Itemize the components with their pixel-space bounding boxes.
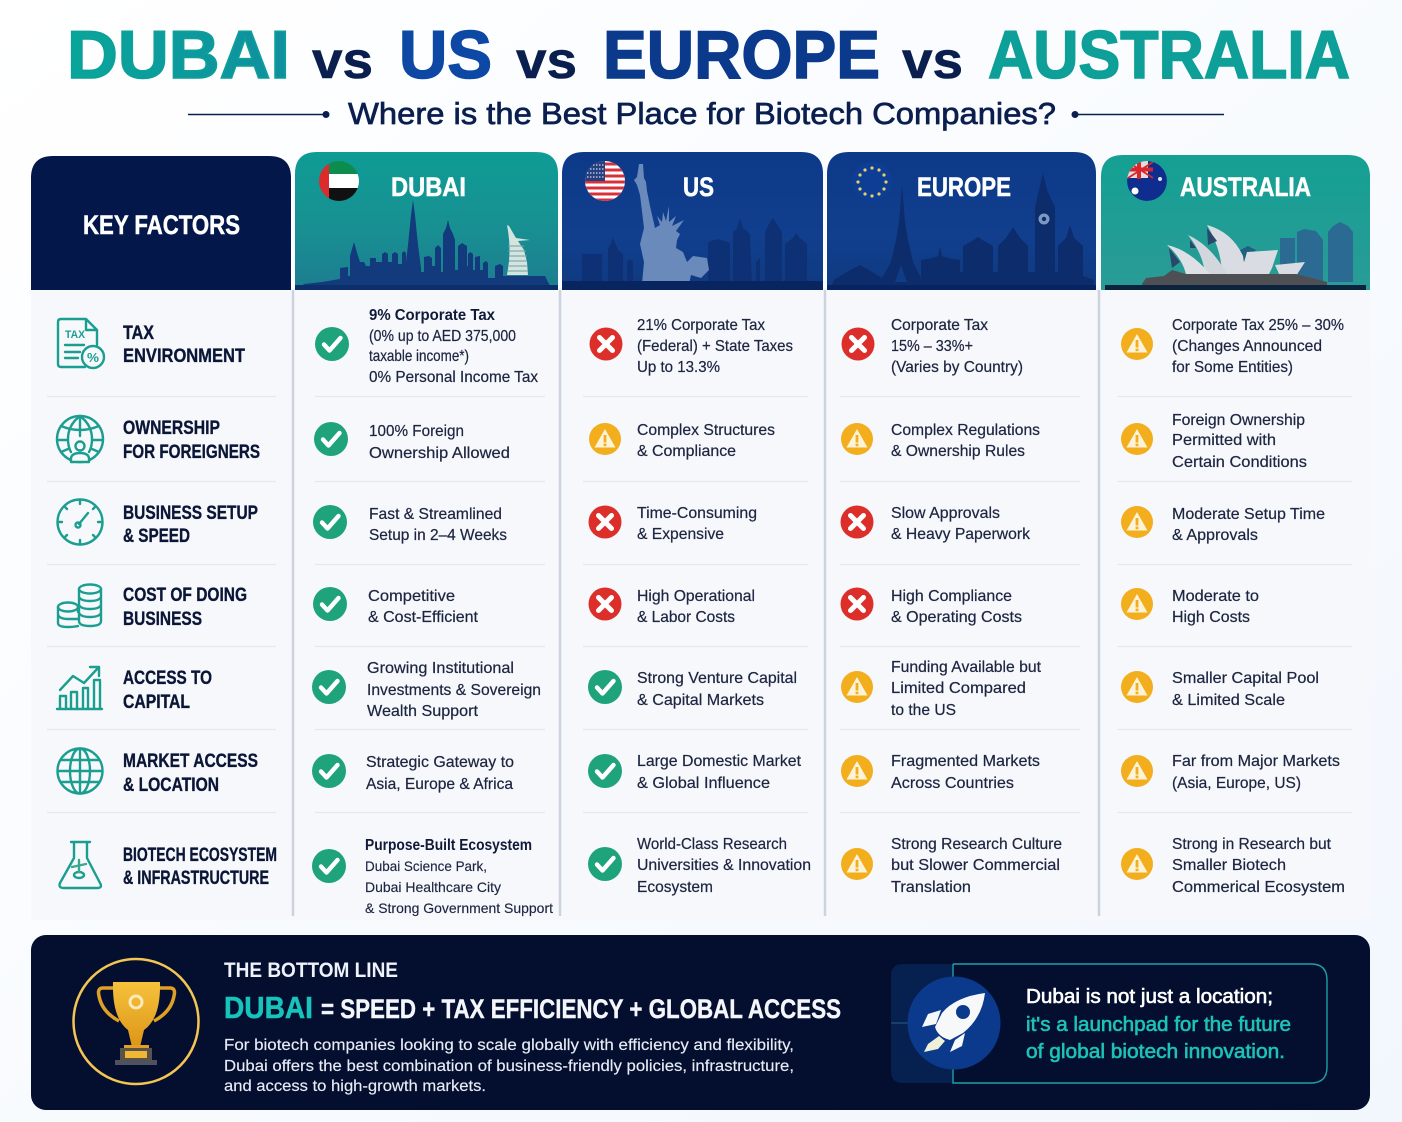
header: Dubai [295,152,558,290]
US: cost [588,588,755,626]
Dubai: cost: Competitive [368,588,455,605]
Australia: ecosystem: Smaller Biotech [1172,857,1286,874]
icon: tax document: TAX [65,329,86,341]
icon: globe [58,748,102,794]
bottom line panel: and access to high-growth markets. [224,1078,486,1095]
Europe: ecosystem: Translation [891,879,971,896]
Dubai: setup [313,505,507,544]
Dubai skyline [296,200,552,290]
Australia: cost: High Costs [1172,609,1250,626]
Europe: market: Fragmented Markets [891,753,1040,770]
title [67,17,1350,93]
icon: coin stacks [58,584,101,627]
US: setup: Time-Consuming [637,505,757,522]
Europe: ownership [841,422,1040,460]
Dubai: capital: Wealth Support [367,703,479,720]
Australia: tax: for Some Entities) [1172,359,1293,376]
Dubai: ecosystem: & Strong Government Support [365,900,553,916]
Dubai: tax: 9% Corporate Tax [369,307,495,324]
subtitle [188,96,1224,131]
Europe: setup [840,505,1031,543]
Sydney Opera House [1142,225,1327,286]
Dubai: tax [315,307,538,386]
factor: tax environment: TAX [123,323,154,344]
US: market: Large Domestic Market [637,753,802,770]
US: ecosystem: Universities & Innovation [637,857,811,874]
Australia: cost [1121,588,1259,626]
Dubai: cost: & Cost-Efficient [368,609,479,626]
Australia: capital [1121,670,1319,709]
Dubai: ecosystem: Purpose-Built Ecosystem [365,837,532,854]
factor: market access: & LOCATION [123,775,219,796]
icon: stopwatch gauge [58,500,102,544]
Australia: tax [1121,317,1344,376]
factor: market access: MARKET ACCESS [123,751,258,772]
Sydney city buildings [1280,222,1353,282]
Australia: setup [1121,506,1325,544]
factor: ownership: FOR FOREIGNERS [123,442,260,463]
Dubai: setup: Setup in 2–4 Weeks [369,527,507,544]
Dubai: ecosystem [312,837,553,916]
Burj Al Arab [507,225,530,275]
title: EUROPE [603,17,880,93]
title: DUBAI [67,17,290,93]
Europe: market [841,753,1040,792]
Australia: setup: & Approvals [1172,527,1258,544]
factor: setup speed: BUSINESS SETUP [123,503,258,524]
Europe: ecosystem: Strong Research Culture [891,836,1062,853]
callout: Dubai is not just a location; [1026,986,1273,1008]
callout: it's a launchpad for the future [1026,1014,1291,1036]
Europe: cost: High Compliance [891,588,1012,605]
US: setup: & Expensive [637,526,724,543]
US: ownership: & Compliance [637,443,736,460]
Australia: ownership: Certain Conditions [1172,454,1307,471]
Australia: capital: & Limited Scale [1172,692,1285,709]
Australia: market: (Asia, Europe, US) [1172,775,1301,792]
Dubai: market: Strategic Gateway to [366,754,514,771]
US: ecosystem: World-Class Research [637,836,787,853]
US: tax: 21% Corporate Tax [637,317,765,334]
Australia: cost: Moderate to [1172,588,1259,605]
factor: tax environment: ENVIRONMENT [123,346,245,367]
factor: capital: ACCESS TO [123,668,212,689]
US: capital: & Capital Markets [637,692,764,709]
bottom line panel: THE BOTTOM LINE [224,959,398,982]
New York skyline [566,218,807,290]
factor: market access [58,748,258,796]
header: US: US [683,172,714,202]
US: cost: & Labor Costs [637,609,735,626]
icon: tax document [58,319,104,368]
icon: rising bar chart [57,667,102,709]
Dubai: tax: (0% up to AED 375,000 [369,328,516,345]
header: Australia: AUSTRALIA [1180,172,1311,202]
Europe: tax: (Varies by Country) [891,359,1023,376]
US: ecosystem [588,836,811,896]
Dubai: ownership: Ownership Allowed [369,445,510,462]
Dubai: ownership: 100% Foreign [369,423,464,440]
Dubai: capital: Investments & Sovereign [367,682,541,699]
Europe: ownership: Complex Regulations [891,422,1040,439]
factor: ownership [57,416,260,463]
icon: flask [60,842,101,888]
Dubai: ownership [314,422,510,462]
Dubai: ecosystem: Dubai Science Park, [365,858,487,874]
Europe: market: Across Countries [891,775,1014,792]
table body background [31,288,1370,920]
factor: cost: COST OF DOING [123,585,247,606]
title: vs [516,32,577,90]
Australia: capital: Smaller Capital Pool [1172,670,1319,687]
factor: cost: BUSINESS [123,609,202,630]
icon: rocket [922,993,985,1052]
factor: biotech ecosystem [60,842,277,889]
factor: capital: CAPITAL [123,692,190,713]
factor: setup speed [58,500,258,547]
factor: setup speed: & SPEED [123,526,190,547]
factor: capital [57,667,212,713]
Australia: tax: (Changes Announced [1172,338,1322,355]
Europe: ecosystem [841,836,1062,896]
icon: tax document: % [87,350,99,365]
callout [891,964,1327,1083]
Europe: capital: Funding Available but [891,659,1042,676]
US: ecosystem: Ecosystem [637,879,713,896]
Europe: cost: & Operating Costs [891,609,1022,626]
US: ownership: Complex Structures [637,422,775,439]
US: capital: Strong Venture Capital [637,670,797,687]
title: vs [902,32,963,90]
Australia: tax: Corporate Tax 25% – 30% [1172,317,1344,334]
Dubai: tax: taxable income*) [369,348,469,365]
header: US [562,152,823,290]
header: key factors [31,156,291,290]
bottom line panel [31,935,1370,1110]
flag: USA [585,161,625,201]
Dubai: market [312,754,514,793]
Australia: market [1121,753,1340,792]
icon: trophy [74,959,198,1084]
factor: biotech ecosystem: & INFRASTRUCTURE [123,868,269,889]
Australia: ownership: Permitted with [1172,432,1276,449]
factor: ownership: OWNERSHIP [123,418,220,439]
header: Europe [827,152,1096,290]
Dubai: market: Asia, Europe & Africa [366,776,513,793]
Dubai: capital: Growing Institutional [367,660,514,677]
European skyline [830,173,1094,290]
Europe: ownership: & Ownership Rules [891,443,1025,460]
US: cost: High Operational [637,588,755,605]
Australia: market: Far from Major Markets [1172,753,1340,770]
US: ownership [589,422,775,460]
Australia: ecosystem [1121,836,1345,896]
US: tax: (Federal) + State Taxes [637,338,793,355]
Europe: setup: & Heavy Paperwork [891,526,1031,543]
Dubai: ecosystem: Dubai Healthcare City [365,879,501,895]
bottom line panel: Dubai offers the best combination of business-friendly policies, infrastructure, [224,1058,794,1075]
Europe: capital: Limited Compared [891,680,1026,697]
Europe: tax: Corporate Tax [891,317,988,334]
US: market [588,753,802,792]
US: capital [588,670,797,709]
Dubai: cost [313,587,479,626]
factor: tax environment [58,319,245,368]
Europe: tax: 15% – 33%+ [891,338,973,355]
flag: EU [852,162,892,202]
title: US [399,17,492,93]
Australia: ecosystem: Commerical Ecosystem [1172,879,1345,896]
header: Europe: EUROPE [917,172,1011,202]
US: setup [588,505,757,543]
Europe: tax [842,317,1023,376]
bottom line panel: For biotech companies looking to scale globally with efficiency and flexibility, [224,1037,794,1054]
Statue of Liberty [634,164,709,284]
US: tax [590,317,793,376]
factor: biotech ecosystem: BIOTECH ECOSYSTEM [123,845,277,866]
bottom line panel: DUBAI [224,990,313,1025]
header: Dubai: DUBAI [391,172,466,202]
Europe: cost [840,588,1022,626]
Dubai: tax: 0% Personal Income Tax [369,369,538,386]
Dubai: capital [312,660,541,720]
bottom line panel: = SPEED + TAX EFFICIENCY + GLOBAL ACCESS [321,994,841,1024]
Europe: ecosystem: but Slower Commercial [891,857,1060,874]
title: vs [312,32,373,90]
Australia: ownership [1121,412,1307,471]
Australia: ownership: Foreign Ownership [1172,412,1305,429]
header: key factors: KEY FACTORS [83,210,240,240]
Europe: setup: Slow Approvals [891,505,1000,522]
Australia: setup: Moderate Setup Time [1172,506,1325,523]
callout: of global biotech innovation. [1026,1041,1285,1063]
subtitle: Where is the Best Place for Biotech Companies? [348,96,1056,131]
header: Australia [1101,155,1370,290]
Australia: ecosystem: Strong in Research but [1172,836,1332,853]
Europe: capital [841,659,1042,719]
US: tax: Up to 13.3% [637,359,720,376]
Europe: capital: to the US [891,702,956,719]
Dubai: setup: Fast & Streamlined [369,506,502,523]
US: market: & Global Influence [637,775,770,792]
factor: cost [58,584,247,630]
flag: UAE [319,161,359,201]
icon: globe with person [57,416,103,462]
flag: Australia [1127,161,1167,201]
title: AUSTRALIA [988,17,1350,93]
